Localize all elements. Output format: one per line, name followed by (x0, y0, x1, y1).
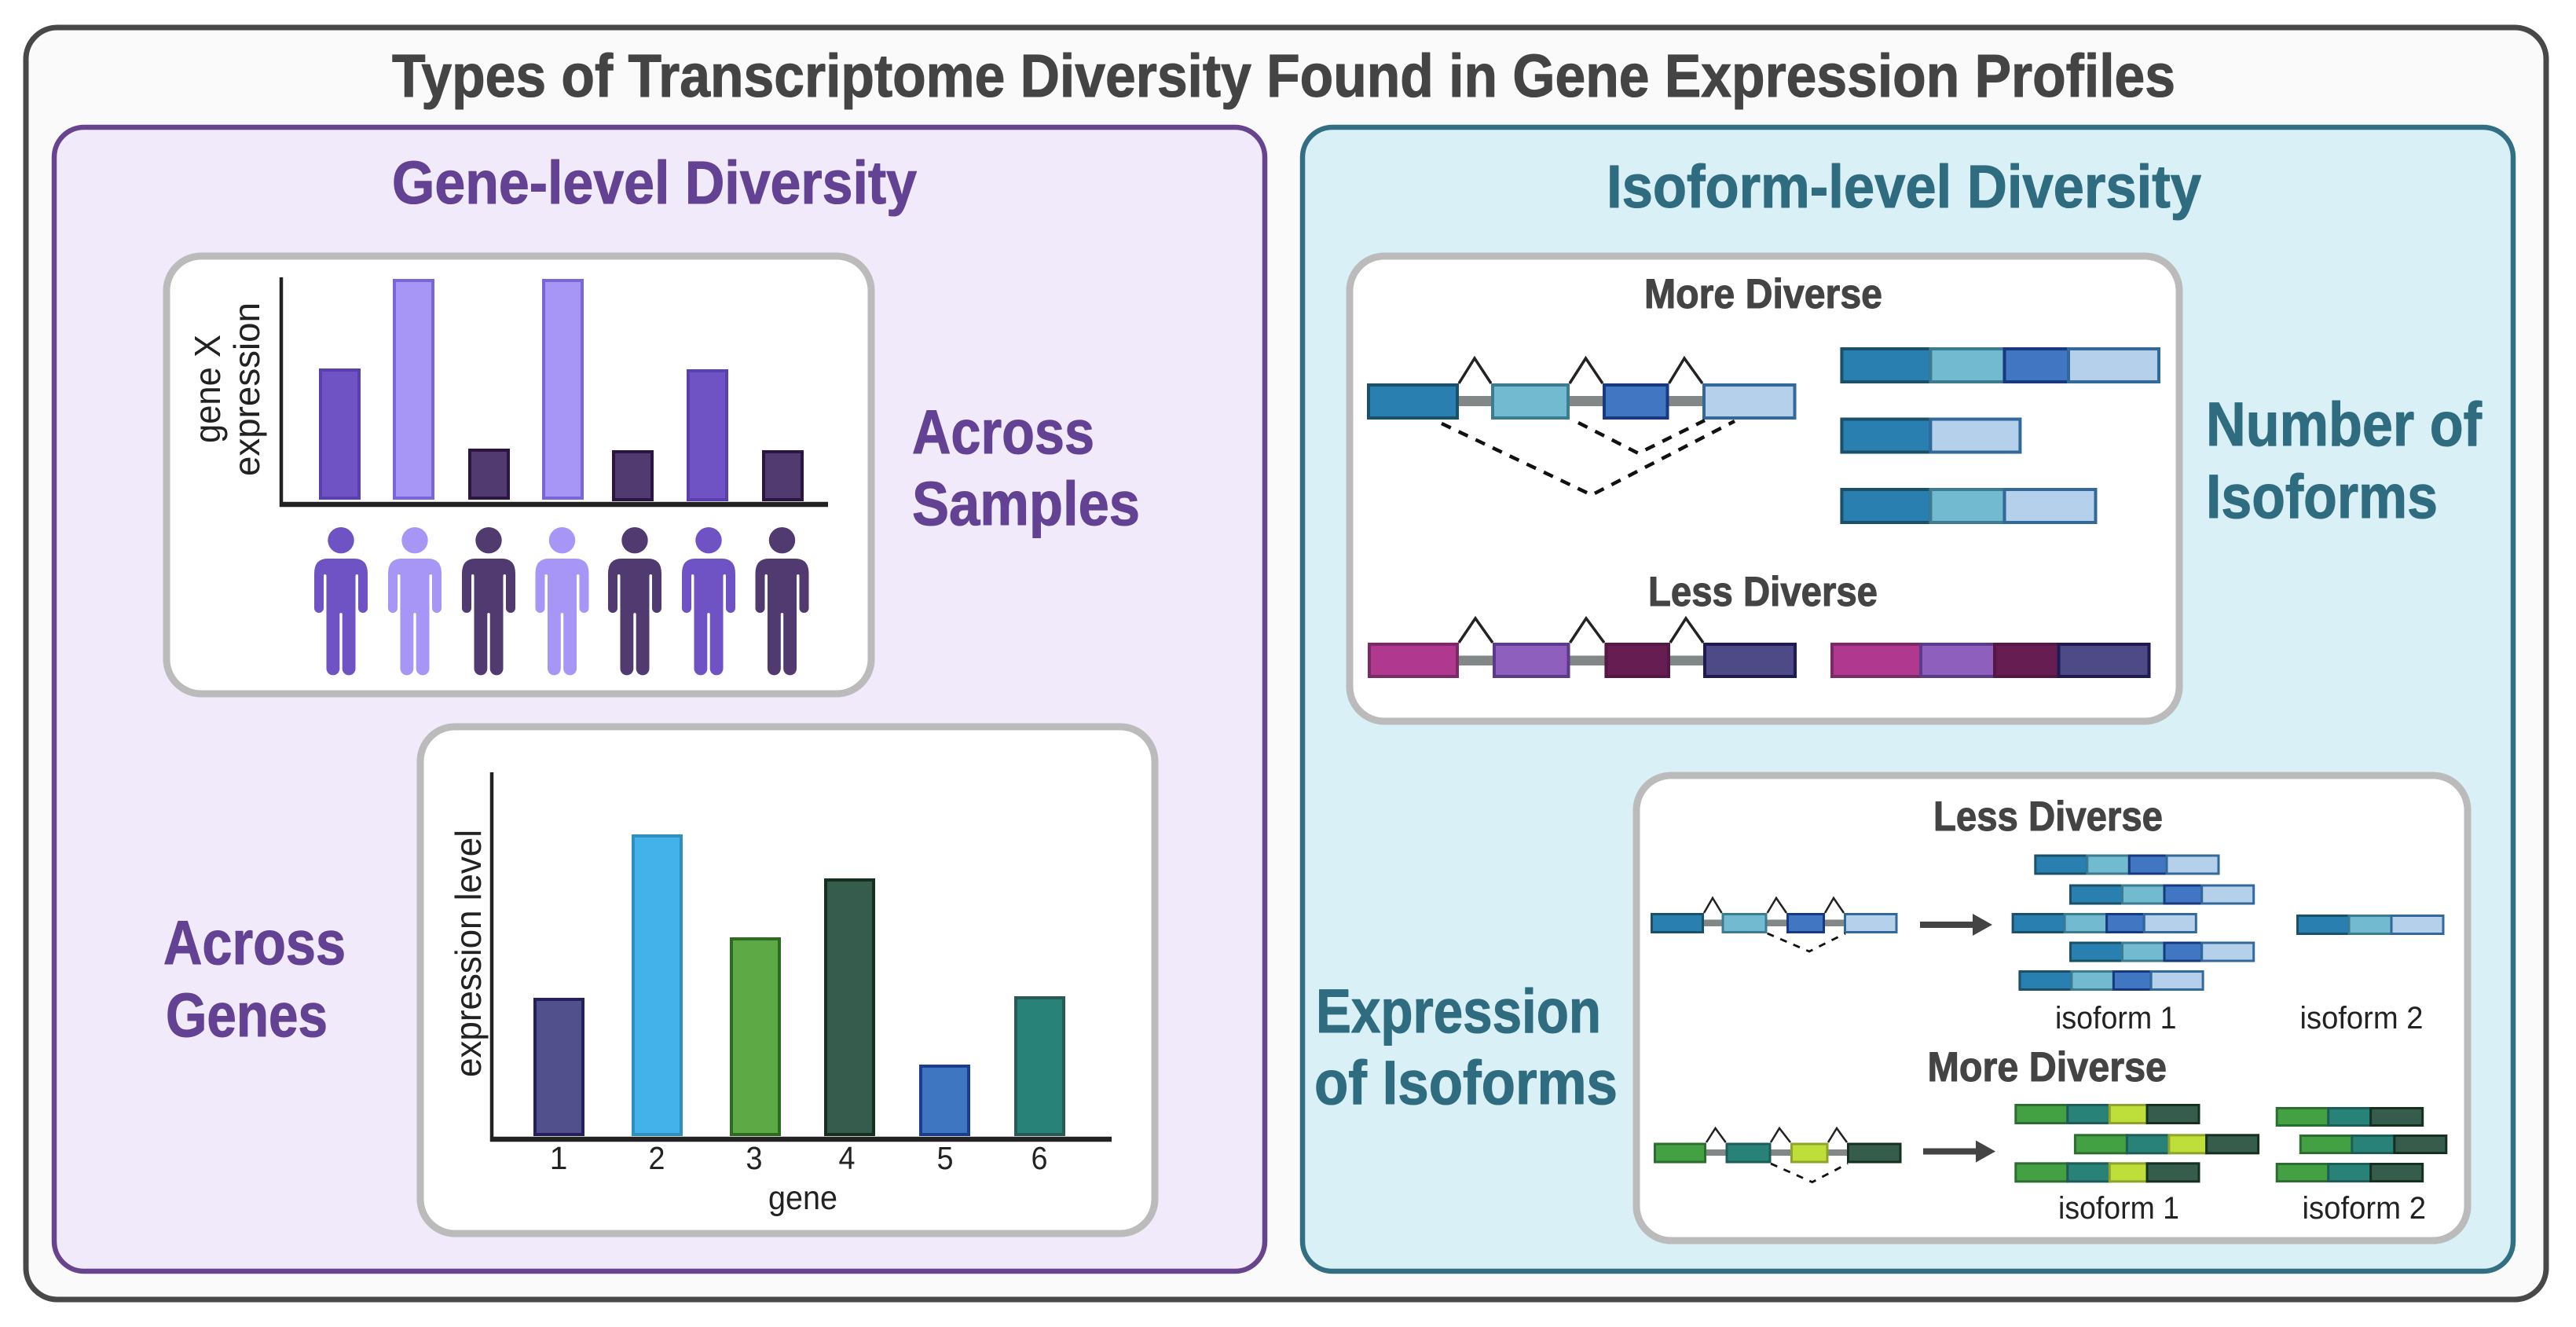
transcript (2071, 885, 2254, 904)
label: isoform 1: isoform 1 (2058, 1191, 2179, 1226)
label: expression of isoforms (1314, 976, 1618, 1117)
label: isoform 2: isoform 2 (2300, 1001, 2423, 1036)
icon: person (462, 527, 515, 675)
label: across samples: Samples (912, 468, 1140, 538)
card: number of isoforms (1350, 256, 2179, 721)
gene model: more diverse (1369, 358, 1794, 495)
isoform stack: isoform 1 (2016, 1105, 2259, 1182)
transcript (2300, 1136, 2446, 1153)
label: across genes: Genes (166, 980, 328, 1050)
icon: person (608, 527, 661, 675)
people icons: samples (314, 527, 809, 675)
axis ticks: gene numbers (550, 1140, 1048, 1176)
subheading: less diverse: Less Diverse (1648, 569, 1878, 615)
isoform stack: isoform 1 (2013, 856, 2254, 990)
axis ticks: gene numbers: 4 (839, 1140, 855, 1176)
isoform: three exons (1841, 489, 2096, 522)
isoform: two exons (1841, 420, 2020, 453)
transcript (2071, 943, 2254, 961)
axis ticks: gene numbers: 6 (1031, 1140, 1048, 1176)
isoform stack: isoform 2 (2277, 1108, 2446, 1182)
isoform stack: isoform 2 (2297, 916, 2443, 933)
transcript (2016, 1105, 2199, 1124)
label: isoform 2: isoform 2 (2302, 1191, 2426, 1226)
subheading: less diverse: Less Diverse (1933, 794, 2163, 840)
label: number of isoforms (2206, 389, 2483, 531)
arrow (1920, 914, 1992, 936)
panel: gene-level diversity (54, 127, 1265, 1271)
panel: isoform-level diversity (1303, 127, 2513, 1271)
bar chart: expression per gene (490, 772, 1112, 1142)
heading: gene-level diversity: Gene-level Diversity (392, 149, 917, 217)
gene model: more diverse (1654, 1128, 1900, 1182)
heading: isoform-level diversity: Isoform-level Diversity (1607, 153, 2201, 221)
axis label: gene X expression: expression (226, 302, 267, 476)
card: across genes chart (420, 727, 1155, 1234)
label: across samples (912, 397, 1140, 538)
label: across genes (163, 907, 346, 1050)
subheading: more diverse: More Diverse (1928, 1044, 2167, 1091)
axis ticks: gene numbers: 2 (649, 1140, 665, 1176)
icon: person (682, 527, 735, 675)
bar chart: gene X across samples (280, 277, 828, 507)
subheading: more diverse: More Diverse (1644, 271, 1882, 317)
label: number of isoforms: Isoforms (2206, 461, 2438, 531)
axis ticks: gene numbers: 1 (550, 1140, 567, 1176)
icon: person (756, 527, 809, 675)
transcript (2277, 1108, 2423, 1125)
transcript (2277, 1164, 2423, 1182)
axis label: gene: gene (768, 1179, 837, 1217)
axis label: gene X expression (187, 302, 267, 476)
label: across samples: Across (912, 397, 1094, 467)
transcript (2075, 1135, 2259, 1153)
title: Types of Transcriptome Diversity Found in Gene Expression Profiles (392, 42, 2175, 110)
card: across samples chart (167, 256, 871, 694)
label: expression of isoforms: of Isoforms (1314, 1047, 1618, 1117)
icon: person (388, 527, 442, 675)
transcript (2020, 971, 2203, 990)
axis label: expression level: expression level (448, 830, 489, 1077)
gene model: less diverse (1651, 898, 1896, 951)
gene model: less diverse (1369, 618, 1795, 676)
label: number of isoforms: Number of (2206, 389, 2483, 459)
transcript (2036, 856, 2219, 874)
transcript (2013, 915, 2196, 932)
label: isoform 1: isoform 1 (2055, 1001, 2176, 1036)
axis ticks: gene numbers: 3 (746, 1140, 762, 1176)
isoform: four exons (1841, 349, 2159, 382)
label: expression of isoforms: Expression (1316, 976, 1601, 1046)
axis ticks: gene numbers: 5 (936, 1140, 954, 1176)
transcript (2016, 1164, 2199, 1182)
axis label: gene X expression: gene X (187, 335, 228, 443)
icon: person (314, 527, 368, 675)
icon: person (536, 527, 589, 675)
label: across genes: Across (163, 907, 346, 977)
isoform: less diverse transcript (1832, 644, 2149, 676)
arrow (1923, 1141, 1995, 1163)
card: expression of isoforms (1636, 775, 2468, 1241)
